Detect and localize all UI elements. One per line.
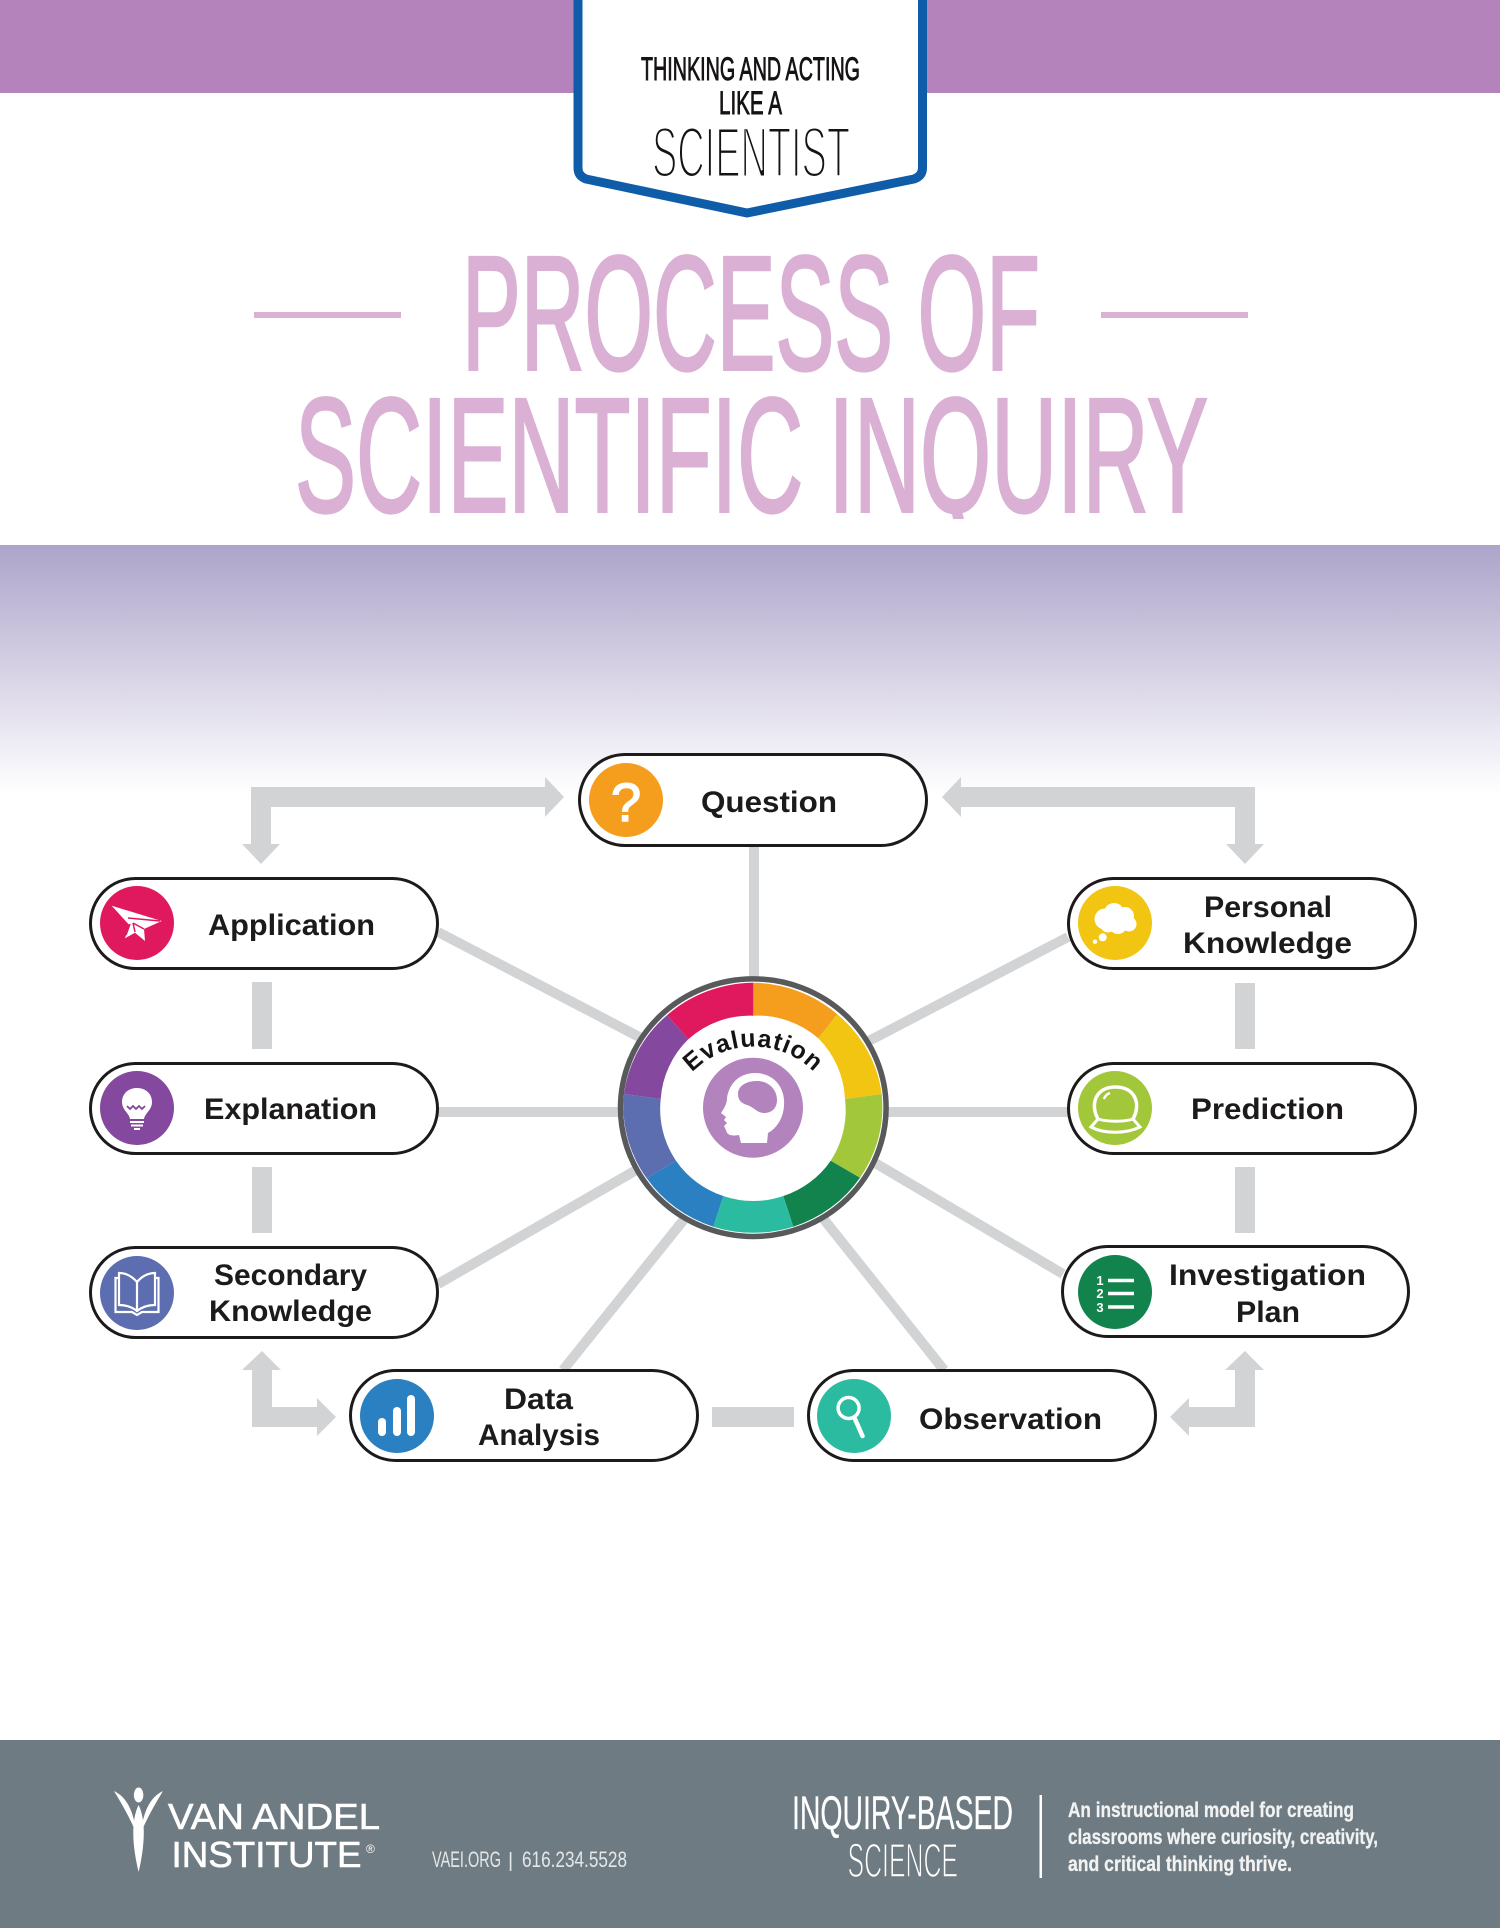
label line 1: Secondary — [214, 1259, 367, 1292]
icon: crystal ball — [1078, 1071, 1152, 1145]
label line 2: Analysis — [478, 1419, 600, 1452]
pill: explanation — [90, 1064, 438, 1154]
arrow: application to question — [242, 777, 564, 864]
label: Prediction — [1191, 1093, 1344, 1126]
label: Explanation — [204, 1093, 377, 1126]
header badge — [578, 0, 922, 213]
logo wordmark: VAN ANDEL — [168, 1796, 380, 1837]
evaluation curved label: Evaluation — [682, 1030, 820, 1072]
pill: observation — [808, 1370, 1156, 1460]
inquiry-based science wordmark — [792, 1786, 1013, 1888]
icon: numbered list: 1 — [1096, 1273, 1104, 1288]
icon: numbered list: 3 — [1096, 1300, 1104, 1315]
icon: paper plane — [100, 886, 174, 960]
logo wordmark: INSTITUTE — [172, 1834, 362, 1875]
logo wordmark: ® — [366, 1842, 375, 1856]
tagline: An instructional model for creating — [1068, 1799, 1354, 1822]
icon: question mark — [589, 763, 663, 837]
contact line: | — [508, 1850, 513, 1872]
pill: investigation plan — [1062, 1246, 1408, 1336]
icon: thought cloud — [1078, 886, 1152, 960]
label line 1: Personal — [1204, 891, 1332, 924]
icon: bar chart — [360, 1379, 434, 1453]
pill: secondary knowledge — [90, 1248, 438, 1338]
badge line: scientist: SCIENTIST — [652, 114, 850, 193]
title — [298, 254, 1208, 519]
spokes — [438, 846, 1068, 1370]
header band — [0, 0, 1500, 93]
badge line: thinking and acting: THINKING AND ACTING — [641, 51, 860, 87]
evaluation wheel — [618, 976, 889, 1240]
arrow: observation to investigation plan — [1170, 1351, 1264, 1436]
tagline: and critical thinking thrive. — [1068, 1853, 1292, 1876]
pill: data analysis — [350, 1370, 698, 1460]
label line 1: Data — [504, 1383, 573, 1416]
arrow: secondary knowledge to data analysis — [242, 1351, 336, 1436]
icon: head with brain — [703, 1058, 803, 1158]
contact line: VAEI.ORG — [432, 1847, 501, 1872]
inquiry-based science wordmark: INQUIRY-BASED — [792, 1786, 1013, 1839]
icon: open book — [100, 1256, 174, 1330]
tagline: classrooms where curiosity, creativity, — [1068, 1826, 1378, 1849]
icon: numbered list — [1078, 1255, 1152, 1329]
pill: personal knowledge — [1068, 878, 1416, 968]
pill: question — [580, 754, 926, 846]
icon: light bulb — [100, 1071, 174, 1145]
tagline — [1068, 1799, 1378, 1876]
icon: magnifying glass — [817, 1379, 891, 1453]
title line 1: PROCESS OF — [462, 222, 1040, 404]
contact line — [432, 1847, 627, 1872]
contact line: 616.234.5528 — [522, 1847, 627, 1872]
footer — [0, 1740, 1500, 1928]
wheel segments — [623, 983, 882, 1233]
label line 2: Plan — [1236, 1296, 1300, 1329]
connector bars — [252, 982, 1255, 1427]
inquiry-based science wordmark: SCIENCE — [848, 1835, 958, 1888]
gradient band — [0, 545, 1500, 795]
pill: prediction — [1068, 1064, 1416, 1154]
icon: numbered list: 2 — [1096, 1286, 1104, 1301]
logo wordmark — [168, 1796, 380, 1875]
label line 2: Knowledge — [1183, 927, 1352, 960]
label: Question — [701, 786, 837, 819]
icon: question mark: ? — [611, 773, 641, 833]
label: Application — [208, 909, 375, 942]
logo figure — [114, 1788, 163, 1872]
label: Observation — [919, 1403, 1102, 1436]
badge line: like a: LIKE A — [719, 85, 782, 121]
pill: application — [90, 878, 438, 968]
arrow: question to personal knowledge — [942, 777, 1264, 864]
label line 2: Knowledge — [209, 1295, 372, 1328]
label line 1: Investigation — [1169, 1259, 1366, 1292]
